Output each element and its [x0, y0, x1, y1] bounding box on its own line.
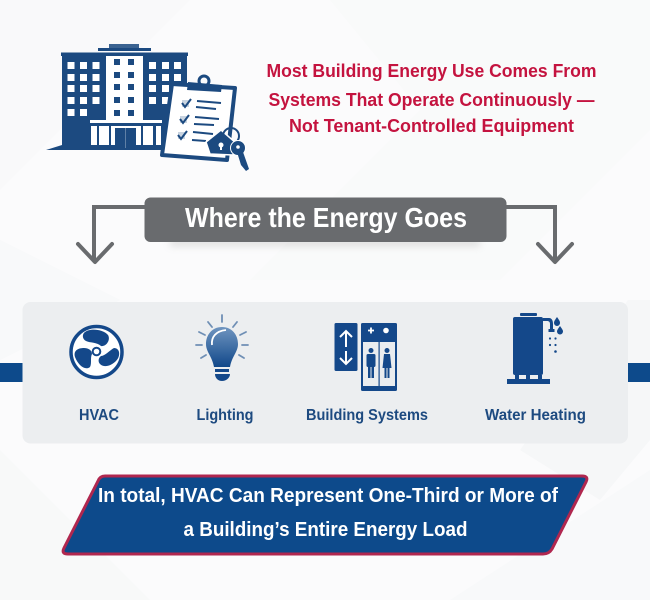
panel: energy categories — [22, 302, 628, 444]
icon: light bulb — [196, 315, 248, 381]
heading: main statement: Systems That Operate Continuously — — [268, 89, 595, 110]
labels: HVAC — [79, 407, 119, 424]
side bar left — [0, 363, 23, 382]
labels: Building Systems — [306, 407, 428, 424]
heading: main statement: Most Building Energy Use Comes From — [266, 60, 596, 81]
heading: main statement — [266, 60, 596, 136]
pill heading: Where the Energy Goes — [185, 202, 467, 233]
side bar right — [627, 363, 650, 382]
building — [46, 44, 188, 150]
labels: Lighting — [196, 407, 254, 424]
labels — [79, 407, 586, 424]
icon: building with clipboard and keys — [46, 44, 249, 171]
icon: fan — [71, 326, 122, 378]
pill heading — [144, 198, 506, 246]
clipboard — [162, 76, 235, 160]
arrow: left — [78, 207, 146, 262]
keys — [206, 128, 249, 171]
labels: Water Heating — [485, 407, 586, 424]
callout banner: In total, HVAC Can Represent One-Third or More of — [98, 484, 558, 507]
heading: main statement: Not Tenant-Controlled Equipment — [289, 115, 574, 136]
arrow: right — [504, 207, 572, 262]
callout banner: a Building’s Entire Energy Load — [184, 518, 468, 541]
callout banner — [63, 476, 587, 554]
icon: elevator — [334, 323, 397, 391]
icon: water heater — [507, 313, 563, 384]
